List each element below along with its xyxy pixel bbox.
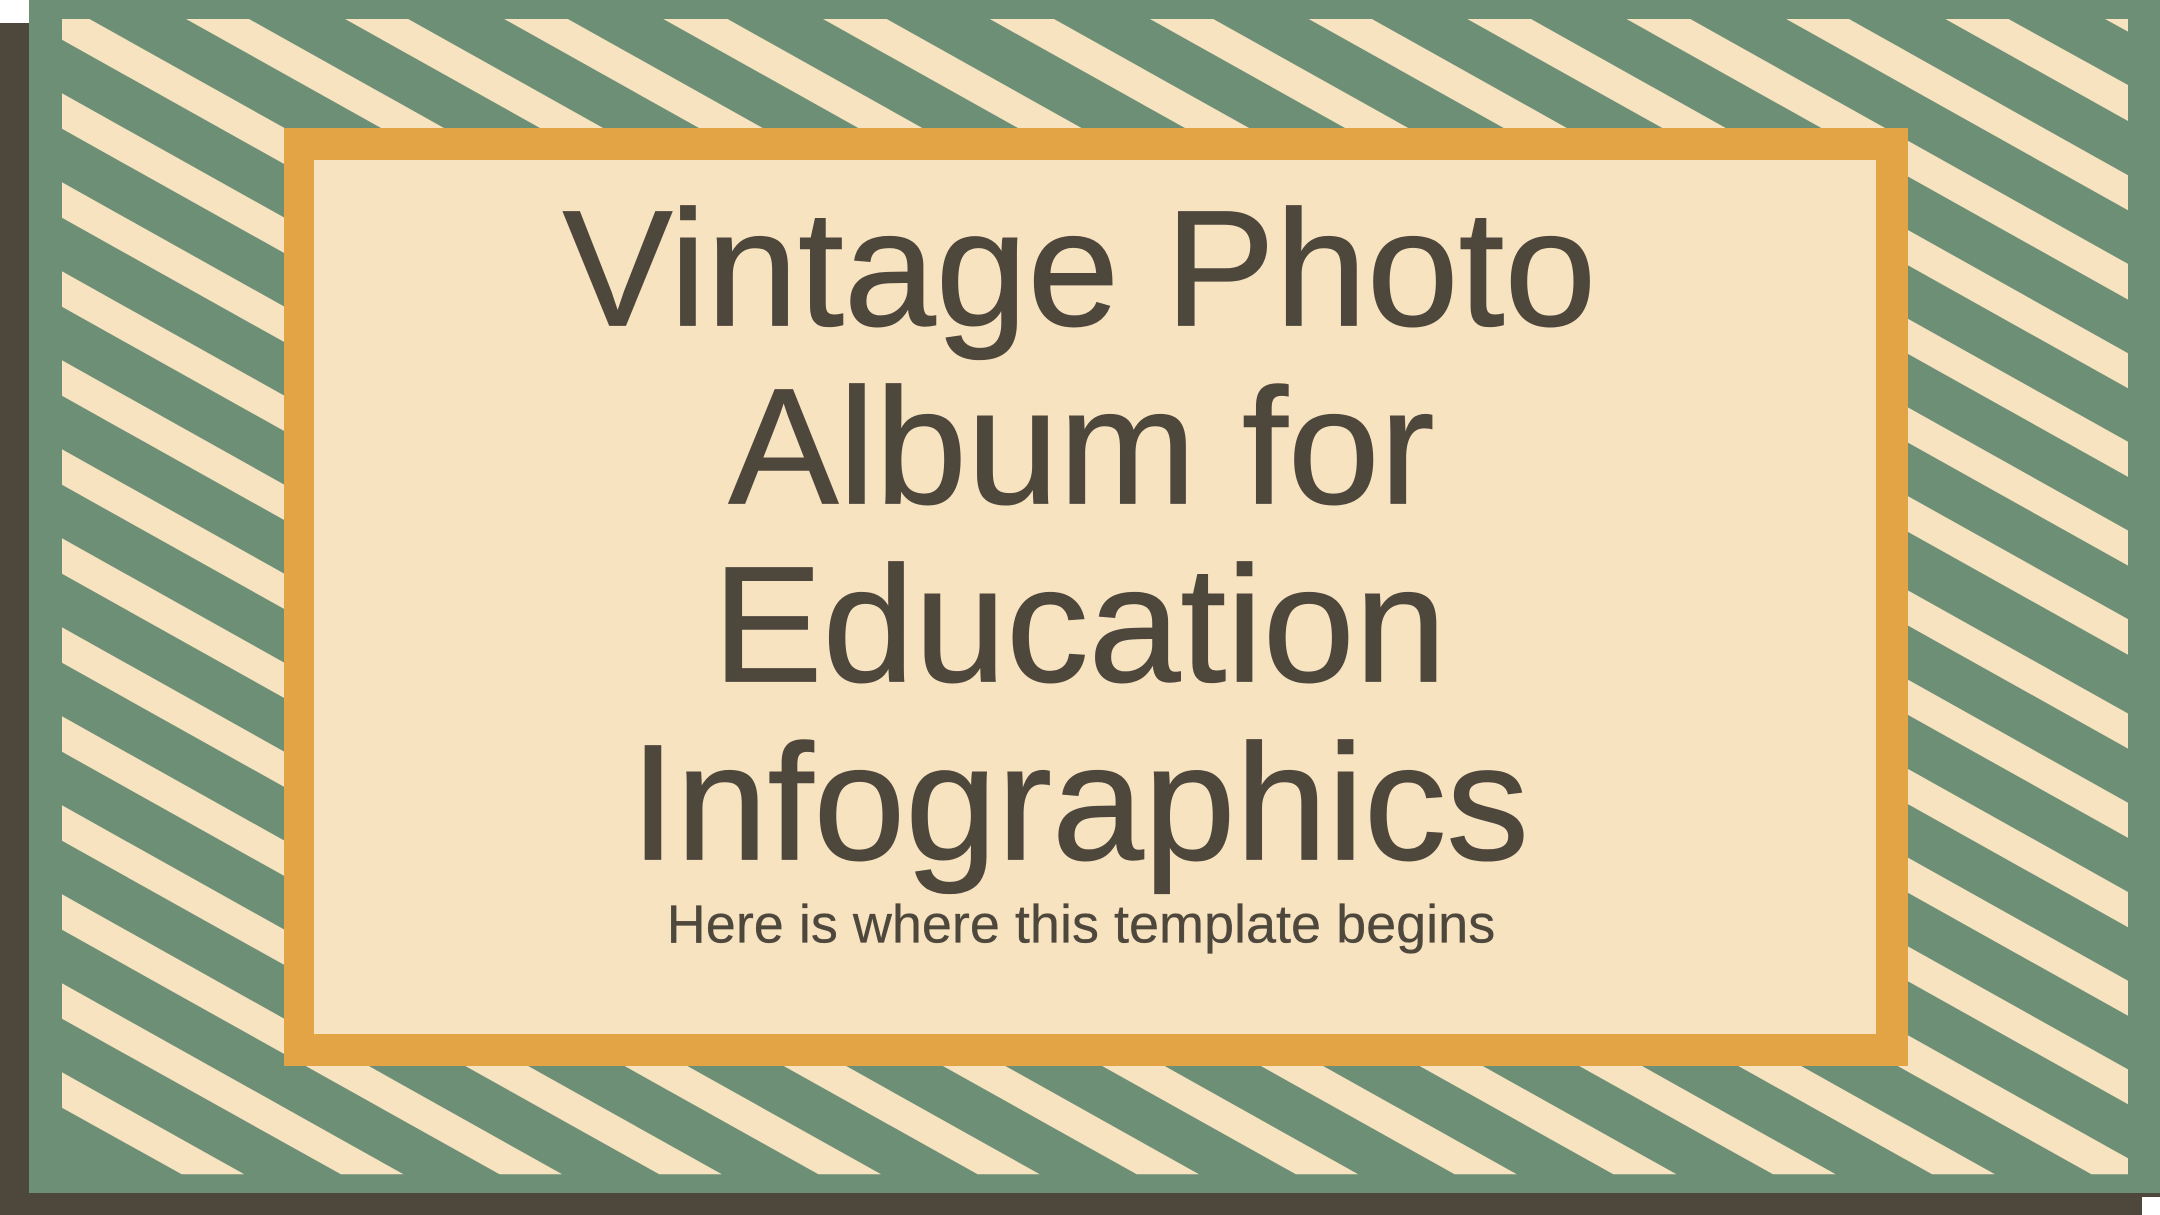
orange photo frame — [284, 128, 1908, 1066]
title: Education — [713, 532, 1446, 716]
title: Infographics — [630, 710, 1529, 894]
title — [563, 176, 1596, 894]
title: Album for — [728, 354, 1435, 538]
subtitle: Here is where this template begins — [667, 895, 1495, 955]
title: Vintage Photo — [563, 176, 1596, 360]
